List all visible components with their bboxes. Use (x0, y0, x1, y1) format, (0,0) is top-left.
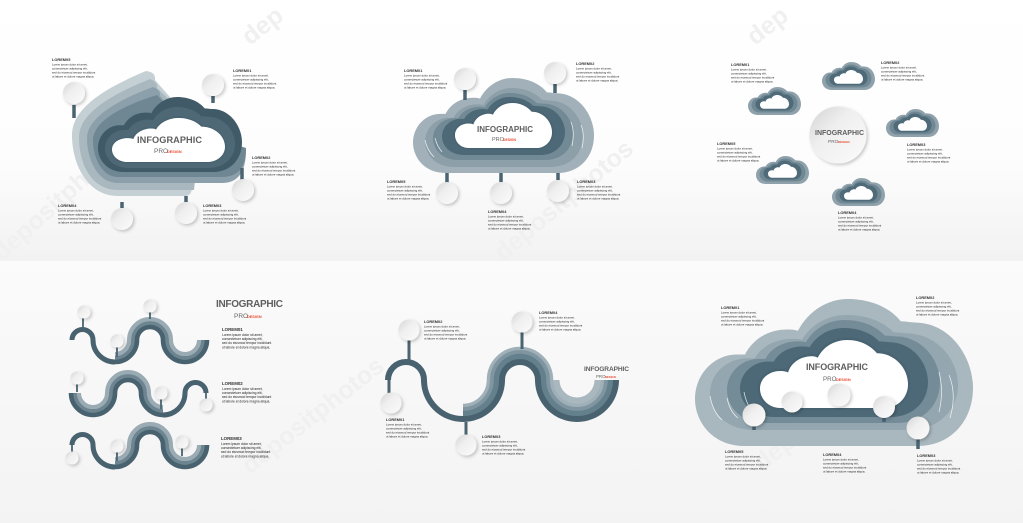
watermark text: depositphotos (748, 349, 901, 477)
labels: consectetuer adipiscing elit, (917, 462, 953, 466)
panel: radial clouds (top right) (717, 60, 950, 231)
labels: sed do eiusmod tempor incididunt (424, 332, 467, 336)
labels: ut labore et dolore magna aliqua. (252, 172, 294, 176)
labels: LOREM01 (386, 417, 405, 422)
labels (386, 310, 582, 455)
title: DESIGN (605, 375, 616, 379)
inner white cloud (112, 118, 225, 162)
stems (447, 84, 558, 183)
title (806, 362, 868, 383)
node circles (66, 300, 212, 464)
labels: LOREM02 (424, 319, 443, 324)
labels: consectetuer adipiscing elit, (717, 150, 753, 154)
labels: sed do eiusmod tempor incididunt (731, 75, 774, 79)
labels: ut labore et dolore magna aliqua. (721, 322, 763, 326)
labels: sed do eiusmod tempor incididunt (838, 223, 881, 227)
labels: Lorem ipsum dolor sit amet, (482, 440, 518, 444)
labels: ut labore et dolore magna aliqua. (577, 196, 619, 200)
labels: LOREM02 (252, 155, 271, 160)
title: PRO (154, 148, 168, 155)
wave bands (71, 319, 207, 467)
labels: consectetuer adipiscing elit, (907, 152, 943, 156)
labels: ut labore et dolore magna aliqua. (488, 226, 530, 230)
labels: Lorem ipsum dolor sit amet, (881, 66, 917, 70)
labels: Lorem ipsum dolor sit amet, (907, 148, 943, 152)
labels: sed do eiusmod tempor incididunt (233, 81, 276, 85)
labels: LOREM04 (823, 452, 842, 457)
labels: LOREM05 (725, 449, 744, 454)
labels: LOREM02 (576, 61, 595, 66)
labels: ut labore et dolore magna aliqua. (221, 454, 269, 458)
watermark text: depositphotos (489, 134, 639, 267)
labels: Lorem ipsum dolor sit amet, (576, 67, 612, 71)
labels: sed do eiusmod tempor incididunt (539, 323, 582, 327)
labels: ut labore et dolore magna aliqua. (52, 74, 94, 78)
labels: LOREM03 (907, 142, 926, 147)
labels: LOREM05 (52, 57, 71, 62)
stems (72, 306, 206, 461)
labels: ut labore et dolore magna aliqua. (731, 79, 773, 83)
labels: consectetuer adipiscing elit, (731, 72, 767, 76)
labels: ut labore et dolore magna aliqua. (233, 85, 275, 89)
panel: large layered cloud (bottom right) (695, 295, 973, 474)
labels: Lorem ipsum dolor sit amet, (577, 185, 613, 189)
panel: single wave (bottom centre) (380, 310, 629, 456)
labels: Lorem ipsum dolor sit amet, (52, 63, 88, 67)
title: INFOGRAPHIC (477, 125, 533, 134)
labels: consectetuer adipiscing elit, (222, 337, 263, 341)
labels: consectetuer adipiscing elit, (576, 70, 612, 74)
labels: consectetuer adipiscing elit, (386, 426, 422, 430)
labels (717, 60, 950, 231)
labels: Lorem ipsum dolor sit amet, (203, 209, 239, 213)
labels: ut labore et dolore magna aliqua. (387, 196, 429, 200)
title: DESIGN (167, 150, 182, 154)
labels: Lorem ipsum dolor sit amet, (424, 325, 460, 329)
title: PRO (828, 139, 839, 145)
labels: sed do eiusmod tempor incididunt (917, 466, 960, 470)
labels: LOREM05 (387, 179, 406, 184)
labels: LOREM03 (221, 436, 242, 441)
labels: ut labore et dolore magna aliqua. (404, 85, 446, 89)
node circles (63, 74, 254, 230)
labels: sed do eiusmod tempor incididunt (576, 74, 619, 78)
title (137, 135, 202, 155)
labels: consectetuer adipiscing elit, (203, 212, 239, 216)
stems (74, 96, 242, 208)
labels: LOREM04 (539, 310, 558, 315)
labels: Lorem ipsum dolor sit amet, (721, 311, 757, 315)
watermark text: depositphotos (236, 352, 389, 480)
labels: sed do eiusmod tempor incididunt (252, 168, 295, 172)
labels: sed do eiusmod tempor incididunt (404, 81, 447, 85)
labels: Lorem ipsum dolor sit amet, (725, 455, 761, 459)
dark cloud ring (98, 97, 242, 172)
labels: consectetuer adipiscing elit, (424, 328, 460, 332)
title: PRO (234, 313, 248, 320)
labels: Lorem ipsum dolor sit amet, (731, 68, 767, 72)
panel: swirl cloud (top left) (52, 57, 295, 230)
labels: ut labore et dolore magna aliqua. (222, 345, 270, 349)
stems (754, 418, 918, 449)
labels: LOREM01 (233, 68, 252, 73)
labels: Lorem ipsum dolor sit amet, (222, 333, 263, 337)
wave bands (388, 349, 616, 419)
labels: LOREM05 (717, 141, 736, 146)
title: DESIGN (836, 378, 851, 382)
labels: ut labore et dolore magna aliqua. (424, 336, 466, 340)
labels: Lorem ipsum dolor sit amet, (717, 147, 753, 151)
labels: Lorem ipsum dolor sit amet, (539, 316, 575, 320)
stems (389, 332, 522, 436)
labels: Lorem ipsum dolor sit amet, (917, 459, 953, 463)
labels: consectetuer adipiscing elit, (482, 444, 518, 448)
labels: sed do eiusmod tempor incididunt (52, 70, 95, 74)
labels: consectetuer adipiscing elit, (222, 391, 263, 395)
labels: LOREM01 (222, 327, 243, 332)
labels: consectetuer adipiscing elit, (838, 220, 874, 224)
title: INFOGRAPHIC (137, 135, 202, 145)
labels: consectetuer adipiscing elit, (725, 458, 761, 462)
labels: sed do eiusmod tempor incididunt (823, 465, 866, 469)
labels: ut labore et dolore magna aliqua. (222, 399, 270, 403)
labels: Lorem ipsum dolor sit amet, (233, 74, 269, 78)
labels: LOREM01 (404, 68, 423, 73)
labels: consectetuer adipiscing elit, (58, 212, 94, 216)
labels (721, 295, 960, 474)
node circles (742, 384, 930, 440)
labels: LOREM03 (577, 179, 596, 184)
labels: ut labore et dolore magna aliqua. (386, 434, 428, 438)
title: PRO (492, 137, 505, 143)
centre circle (810, 106, 866, 164)
title: INFOGRAPHIC (584, 366, 629, 373)
labels: ut labore et dolore magna aliqua. (907, 159, 949, 163)
labels: consectetuer adipiscing elit, (488, 218, 524, 222)
labels: Lorem ipsum dolor sit amet, (387, 185, 423, 189)
labels: sed do eiusmod tempor incididunt (881, 73, 924, 77)
labels: ut labore et dolore magna aliqua. (881, 77, 923, 81)
labels: Lorem ipsum dolor sit amet, (386, 423, 422, 427)
title: INFOGRAPHIC (216, 299, 283, 310)
labels: ut labore et dolore magna aliqua. (58, 220, 100, 224)
labels: Lorem ipsum dolor sit amet, (488, 215, 524, 219)
swirl layers (72, 71, 246, 196)
inner white cloud (455, 103, 552, 148)
labels: ut labore et dolore magna aliqua. (203, 220, 245, 224)
title (815, 130, 864, 145)
labels: consectetuer adipiscing elit, (233, 78, 269, 82)
inner white cloud (760, 340, 908, 408)
labels: sed do eiusmod tempor incididunt (221, 450, 270, 454)
labels: LOREM03 (917, 453, 936, 458)
labels: sed do eiusmod tempor incididunt (577, 192, 620, 196)
labels (221, 327, 271, 458)
labels: LOREM04 (838, 210, 857, 215)
title: DESIGN (503, 138, 517, 142)
labels: consectetuer adipiscing elit, (721, 314, 757, 318)
title (477, 125, 533, 143)
labels: ut labore et dolore magna aliqua. (916, 312, 958, 316)
cloud layers (695, 299, 973, 446)
labels: LOREM01 (731, 62, 750, 67)
title (584, 366, 629, 379)
title (216, 299, 283, 320)
labels: sed do eiusmod tempor incididunt (222, 341, 271, 345)
labels: consectetuer adipiscing elit, (252, 164, 288, 168)
labels: LOREM02 (881, 60, 900, 65)
title: INFOGRAPHIC (806, 362, 868, 372)
labels: consectetuer adipiscing elit, (881, 70, 917, 74)
labels: sed do eiusmod tempor incididunt (725, 462, 768, 466)
labels: sed do eiusmod tempor incididunt (203, 216, 246, 220)
labels: sed do eiusmod tempor incididunt (482, 447, 525, 451)
watermark text: dep (741, 1, 794, 51)
labels: sed do eiusmod tempor incididunt (386, 430, 429, 434)
labels: Lorem ipsum dolor sit amet, (222, 387, 263, 391)
labels: Lorem ipsum dolor sit amet, (58, 209, 94, 213)
labels (387, 61, 620, 230)
labels: LOREM02 (916, 295, 935, 300)
labels: ut labore et dolore magna aliqua. (725, 466, 767, 470)
labels: ut labore et dolore magna aliqua. (717, 158, 759, 162)
labels: ut labore et dolore magna aliqua. (838, 227, 880, 231)
labels: sed do eiusmod tempor incididunt (721, 318, 764, 322)
panel: layered cloud (top centre) (387, 61, 620, 230)
labels: LOREM04 (58, 203, 77, 208)
title: DESIGN (247, 315, 262, 319)
labels: Lorem ipsum dolor sit amet, (404, 74, 440, 78)
labels: sed do eiusmod tempor incididunt (58, 216, 101, 220)
panel: three waves (bottom left) (66, 299, 283, 467)
labels: consectetuer adipiscing elit, (404, 78, 440, 82)
labels: ut labore et dolore magna aliqua. (823, 469, 865, 473)
node circles (380, 312, 532, 456)
labels: consectetuer adipiscing elit, (387, 188, 423, 192)
title: PRO (596, 374, 606, 379)
labels: sed do eiusmod tempor incididunt (488, 222, 531, 226)
labels: ut labore et dolore magna aliqua. (539, 327, 581, 331)
labels: LOREM01 (721, 305, 740, 310)
labels: LOREM03 (203, 203, 222, 208)
labels: Lorem ipsum dolor sit amet, (838, 216, 874, 220)
labels: ut labore et dolore magna aliqua. (482, 451, 524, 455)
labels: consectetuer adipiscing elit, (539, 320, 575, 324)
labels: LOREM04 (488, 209, 507, 214)
title: PRO (823, 376, 837, 383)
labels: consectetuer adipiscing elit, (221, 446, 262, 450)
labels: sed do eiusmod tempor incididunt (387, 192, 430, 196)
labels: ut labore et dolore magna aliqua. (917, 470, 959, 474)
labels: ut labore et dolore magna aliqua. (576, 78, 618, 82)
labels: LOREM02 (222, 381, 243, 386)
labels: Lorem ipsum dolor sit amet, (916, 301, 952, 305)
small clouds (748, 62, 939, 206)
watermark text: dep (236, 1, 289, 51)
labels: consectetuer adipiscing elit, (916, 304, 952, 308)
title: DESIGN (838, 140, 850, 144)
labels: consectetuer adipiscing elit, (823, 462, 859, 466)
labels: Lorem ipsum dolor sit amet, (823, 458, 859, 462)
node circles (436, 62, 569, 204)
labels: Lorem ipsum dolor sit amet, (221, 442, 262, 446)
labels: Lorem ipsum dolor sit amet, (252, 161, 288, 165)
labels (52, 57, 295, 224)
labels: sed do eiusmod tempor incididunt (916, 308, 959, 312)
labels: consectetuer adipiscing elit, (577, 188, 613, 192)
labels: consectetuer adipiscing elit, (52, 66, 88, 70)
title: INFOGRAPHIC (815, 130, 864, 137)
labels: sed do eiusmod tempor incididunt (222, 395, 271, 399)
cloud layers (413, 78, 594, 173)
labels: sed do eiusmod tempor incididunt (717, 154, 760, 158)
labels: sed do eiusmod tempor incididunt (907, 155, 950, 159)
labels: LOREM03 (482, 434, 501, 439)
